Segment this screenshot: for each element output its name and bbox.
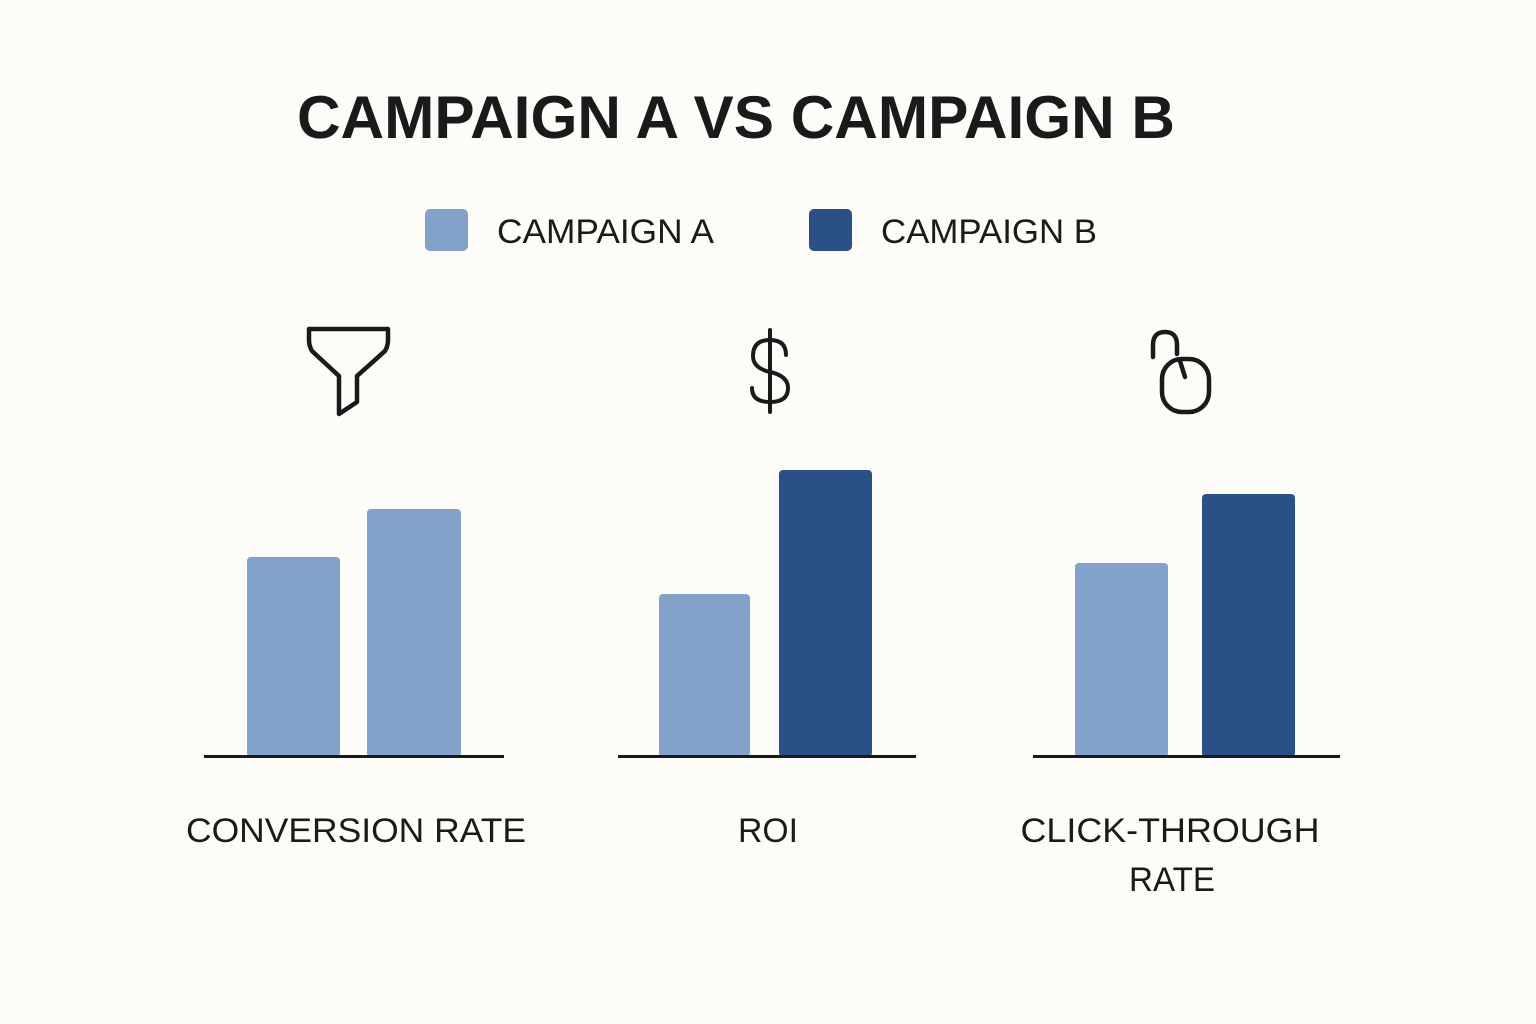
legend: campaign A [425,209,714,251]
label: click-through rate: RATE [1129,861,1215,899]
legend: campaign B: CAMPAIGN B [881,213,1097,251]
title: CAMPAIGN A VS CAMPAIGN B [297,84,1175,151]
icon: funnel [309,329,388,414]
icon: dollar [752,330,788,412]
label: click-through rate: CLICK-THROUGH [1020,812,1320,850]
label: roi: ROI [738,812,798,850]
label: conversion rate: CONVERSION RATE [186,812,526,850]
legend: campaign A: CAMPAIGN A [497,213,714,251]
legend: campaign B [809,209,1097,251]
chart: roi [618,470,916,757]
label: click-through rate [1020,812,1320,899]
chart: click-through rate [1033,494,1340,757]
icon: mouse [1153,332,1209,412]
legend [425,209,1097,251]
chart: conversion rate [204,509,504,757]
